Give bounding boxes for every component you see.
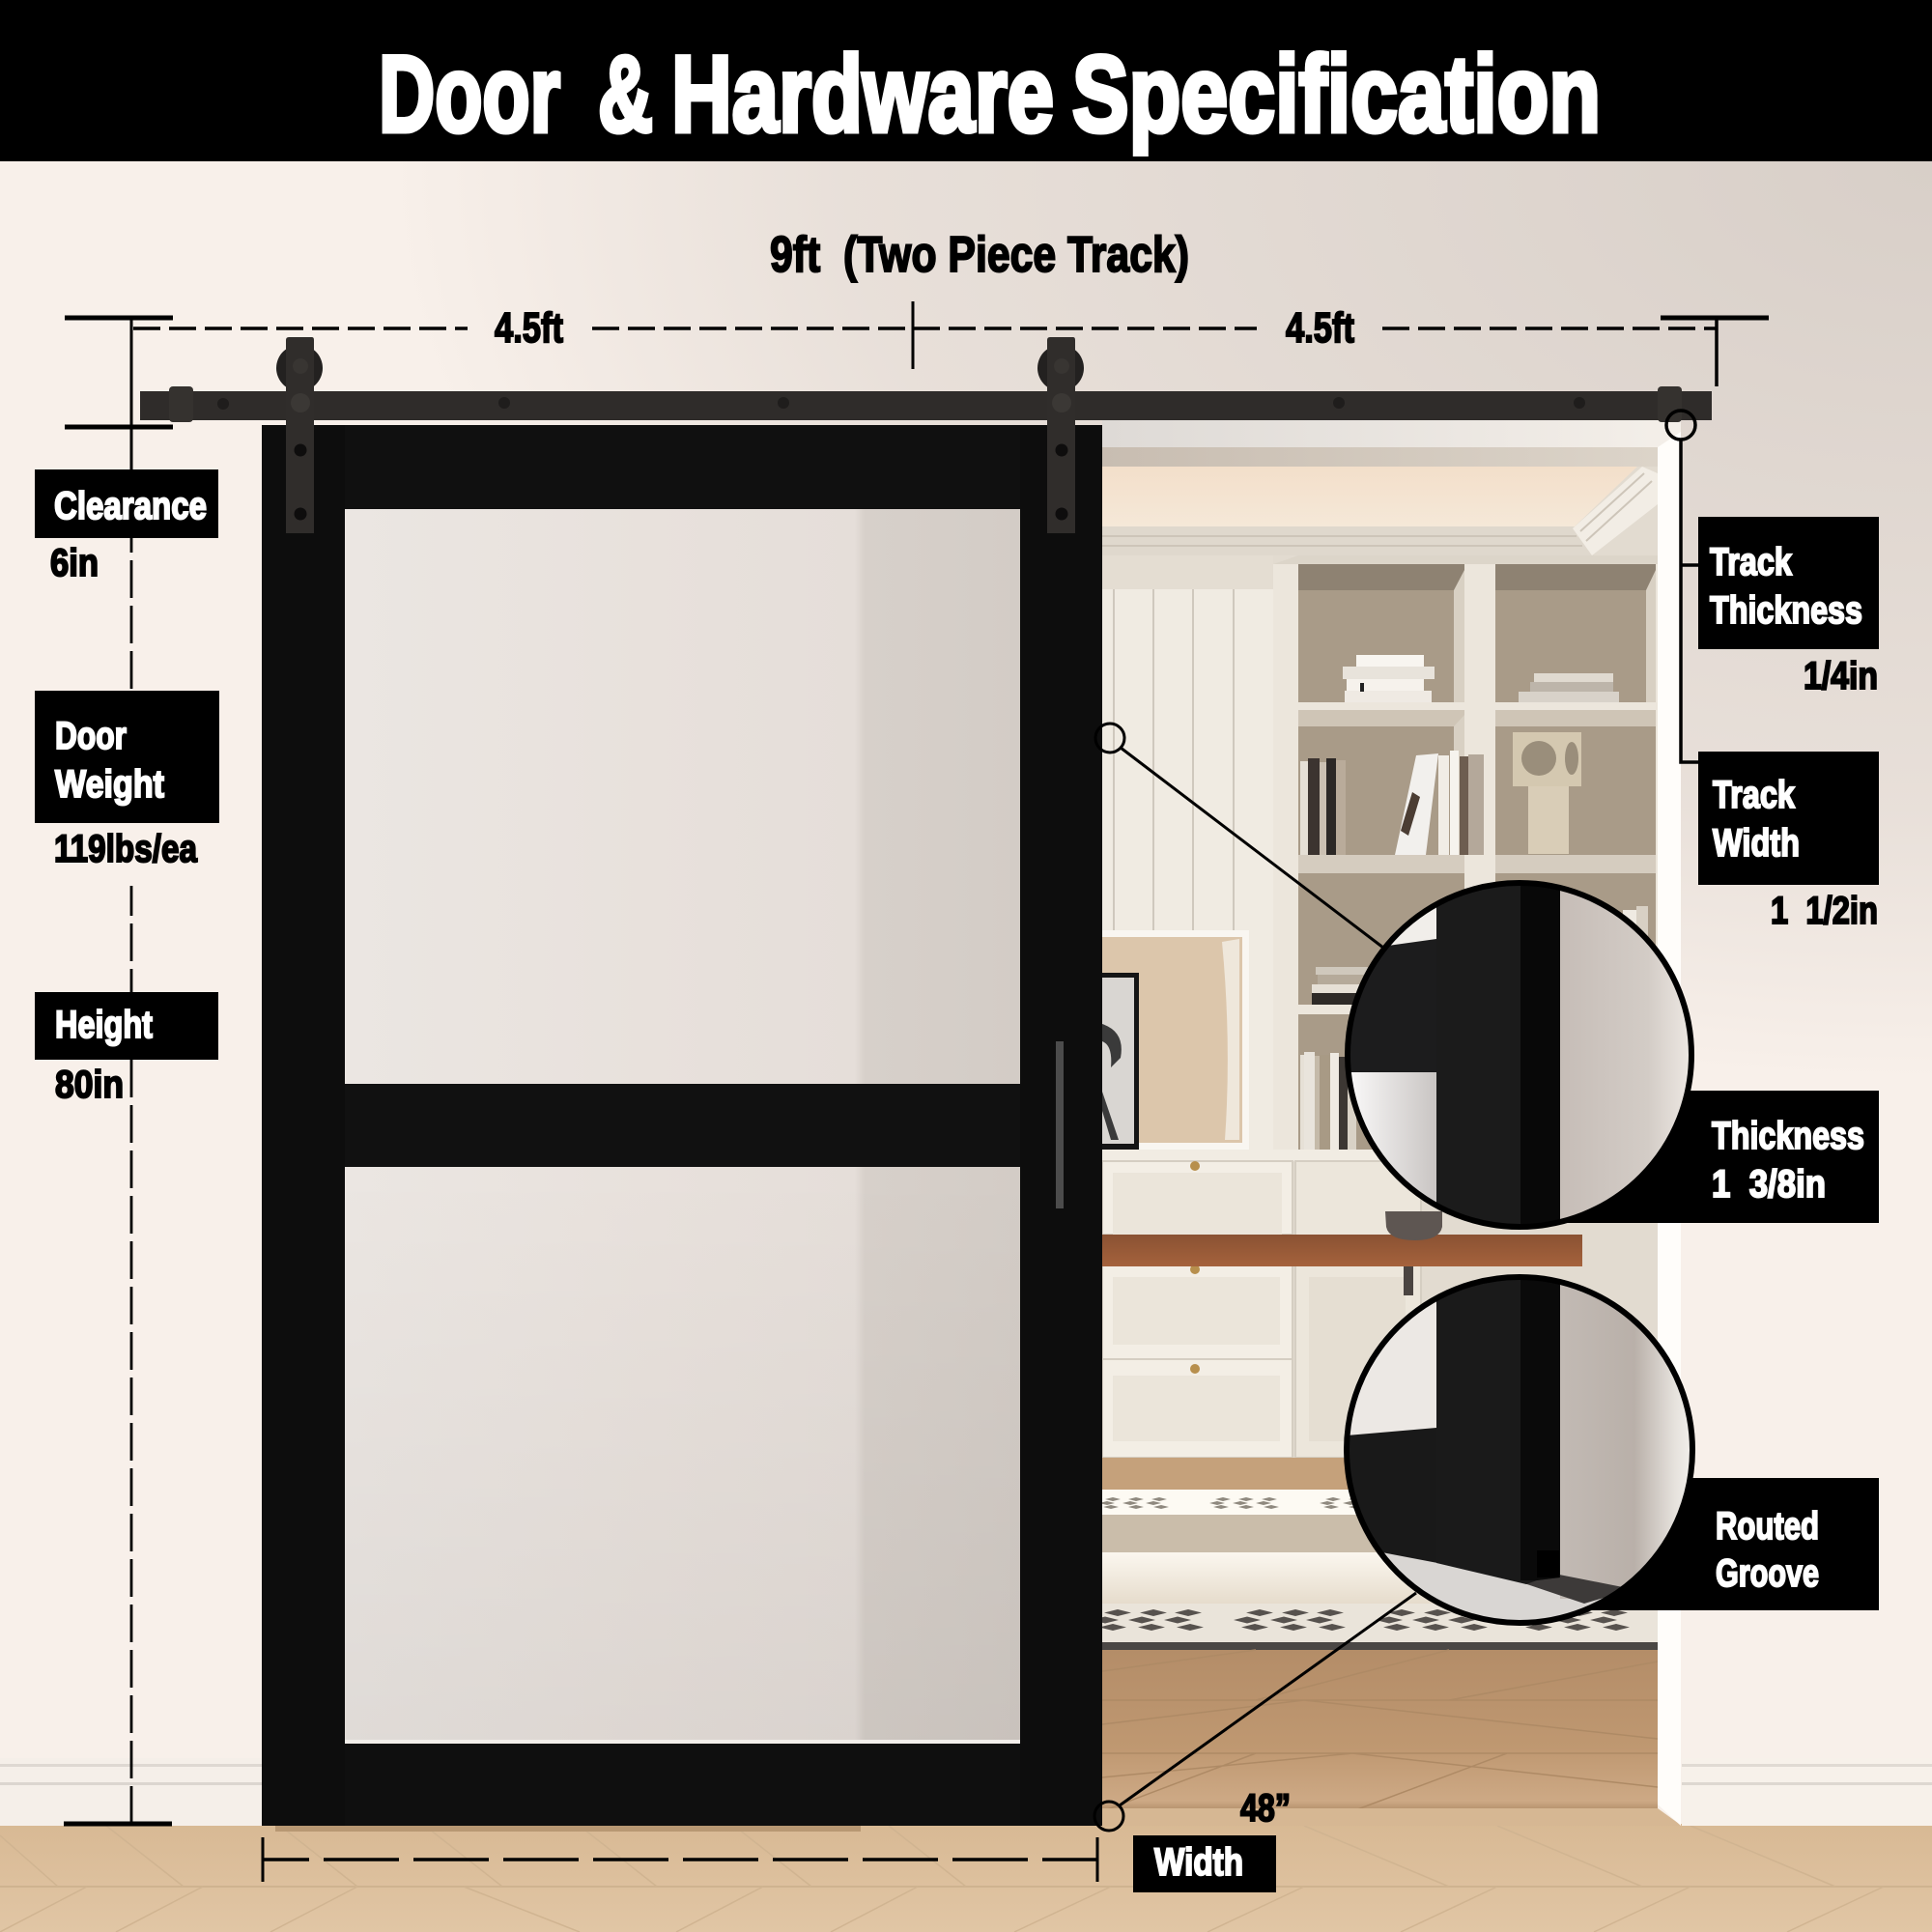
height dimension line [64, 318, 173, 1824]
left baseboard [0, 1758, 263, 1826]
clearance value: 6in [50, 542, 99, 584]
herringbone floor inside room [1102, 1650, 1658, 1814]
routed groove callout: Routed [1716, 1505, 1819, 1548]
ceiling beam [1102, 420, 1681, 467]
title: Hardware [671, 34, 1054, 155]
door shadow on floor [275, 1826, 861, 1832]
books top left [1343, 655, 1435, 702]
books top right of third row [1623, 906, 1648, 1005]
width callout: Width [1154, 1841, 1243, 1884]
right 4.5ft label: 4.5ft [1286, 304, 1354, 352]
door weight callout: Weight [55, 763, 164, 806]
width dimension line [263, 1837, 1097, 1882]
glass upper [345, 509, 1020, 1084]
right end clamp [1658, 386, 1682, 422]
track length dimension line [133, 301, 1769, 386]
door weight value: 119lbs/ea [54, 828, 198, 870]
detail circle: door thickness [1343, 879, 1700, 1236]
routed groove callout [1589, 1478, 1879, 1610]
wood desk [1102, 1235, 1582, 1295]
title: & [598, 34, 653, 155]
lighter floor at threshold [1102, 1808, 1682, 1826]
bottom rail [345, 1744, 1020, 1826]
drawers [1102, 1161, 1421, 1458]
track width value: 1 1/2in [1771, 890, 1878, 932]
rug [1102, 1490, 1658, 1650]
thickness callout: 1 3/8in [1712, 1163, 1826, 1206]
books top right [1519, 673, 1619, 702]
track thickness callout: Thickness [1710, 589, 1862, 632]
thickness pointer [1095, 724, 1383, 948]
title [379, 34, 1601, 155]
room seen through opening [1102, 420, 1682, 1826]
detail circle: routed groove [1343, 1275, 1700, 1642]
height callout [35, 992, 218, 1060]
thickness callout: Thickness [1712, 1115, 1864, 1157]
track width callout [1698, 752, 1879, 885]
right baseboard [1682, 1758, 1932, 1826]
ceiling glow [1102, 467, 1637, 526]
middle rail [345, 1084, 1020, 1167]
thickness callout [1555, 1091, 1879, 1223]
books row two left [1300, 758, 1346, 855]
left 4.5ft label: 4.5ft [495, 304, 563, 352]
right hanger [1037, 337, 1084, 533]
left hanger [276, 337, 323, 533]
track thickness callout [1698, 517, 1879, 649]
track pointer bracket [1666, 411, 1698, 762]
height value: 80in [55, 1064, 124, 1106]
floor [0, 1824, 1932, 1932]
groove pointer [1094, 1593, 1416, 1831]
height callout: Height [55, 1004, 153, 1046]
width value: 48” [1240, 1787, 1291, 1830]
title: Specification [1072, 34, 1601, 155]
track thickness callout: Track [1710, 541, 1793, 583]
top rail [345, 425, 1020, 509]
door weight callout [35, 691, 219, 823]
framed art [1102, 930, 1249, 1151]
door weight callout: Door [55, 715, 127, 757]
track width callout: Track [1713, 774, 1796, 816]
track thickness value: 1/4in [1804, 655, 1878, 697]
books row three [1312, 967, 1368, 1005]
glass lower [345, 1167, 1020, 1744]
sculpture [1513, 732, 1581, 854]
door [262, 425, 1102, 1826]
books row two middle [1395, 751, 1484, 855]
left end clamp [169, 386, 193, 422]
mug [1385, 1211, 1442, 1240]
width callout [1133, 1835, 1276, 1892]
door handle [1056, 1041, 1064, 1208]
track width callout: Width [1713, 822, 1800, 865]
cabinet counter [1102, 1150, 1411, 1161]
clearance callout [35, 469, 218, 538]
bookshelf [1273, 555, 1658, 1159]
books row four [1300, 1052, 1356, 1150]
routed groove callout: Groove [1716, 1552, 1819, 1595]
clearance callout: Clearance [54, 485, 207, 527]
title: Door [379, 34, 560, 155]
inner floor behind rug [1102, 1458, 1658, 1490]
track rail [140, 391, 1712, 420]
title bar [0, 0, 1932, 161]
white door trim [1658, 432, 1681, 1826]
crown moulding [1102, 467, 1658, 555]
track length heading: 9ft (Two Piece Track) [770, 227, 1189, 283]
panelled wall [1102, 555, 1273, 1174]
